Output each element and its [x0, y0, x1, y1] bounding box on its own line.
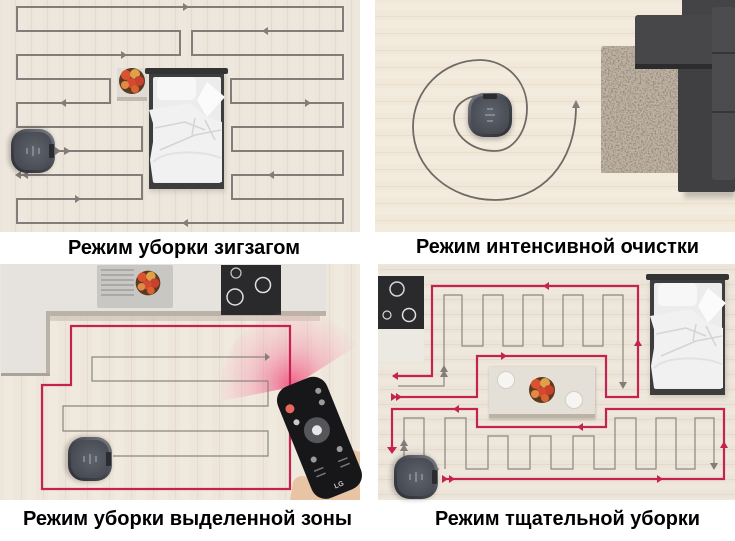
icon: hob and counter: [378, 276, 424, 362]
path: zone boundary: [42, 326, 290, 489]
arrows: grey route: [400, 365, 718, 470]
floor: horizontal planks: [375, 0, 735, 232]
panel: intensive cleaning mode: [375, 0, 735, 232]
remote logo: LG: [333, 480, 346, 490]
path: grey zigzag upper: [398, 295, 623, 386]
arrow: spiral end: [572, 100, 580, 108]
icon: bed: [145, 68, 228, 192]
icon: robot vacuum: [65, 436, 112, 482]
icon: bed: [646, 274, 729, 398]
path: red boundary upper: [393, 286, 638, 397]
icon: remote control: [272, 372, 367, 503]
panel: thorough cleaning mode: [378, 264, 735, 500]
icon: bedside table with fruit: [117, 68, 147, 101]
heading: zigzag mode: Режим уборки зигзагом: [68, 237, 300, 259]
icon: robot vacuum: [467, 93, 513, 140]
panel: selected zone cleaning mode: [0, 264, 367, 503]
panel: zigzag cleaning mode: [0, 0, 360, 232]
path: spiral route: [413, 60, 576, 200]
icon: sink with fruit: [97, 265, 173, 308]
icon: robot vacuum: [391, 454, 438, 500]
arrows: route direction: [15, 3, 311, 227]
icon: table with plates and fruit: [489, 367, 596, 420]
glow: remote infrared signal: [221, 312, 358, 401]
path: red boundary lower: [392, 409, 724, 479]
path: grey zigzag lower: [404, 418, 714, 469]
heading: selected zone mode: Режим уборки выделенной зоны: [23, 508, 352, 530]
floor: vertical planks: [0, 0, 360, 232]
heading: thorough mode: Режим тщательной уборки: [435, 508, 700, 530]
icon: hand: [290, 450, 360, 500]
path: grey zigzag route: [17, 7, 343, 223]
kitchen counter: [1, 264, 326, 376]
icon: robot vacuum: [8, 128, 55, 174]
icon: sofa: [635, 0, 735, 198]
arrows: red route: [387, 282, 728, 483]
arrow: route end: [265, 353, 270, 361]
floor: vertical planks: [0, 264, 360, 500]
icon: rug: [601, 46, 683, 173]
path: grey route inside zone: [63, 357, 268, 456]
icon: gas hob: [221, 265, 281, 315]
heading: intensive mode: Режим интенсивной очистки: [416, 236, 699, 258]
floor: horizontal planks: [378, 264, 735, 500]
